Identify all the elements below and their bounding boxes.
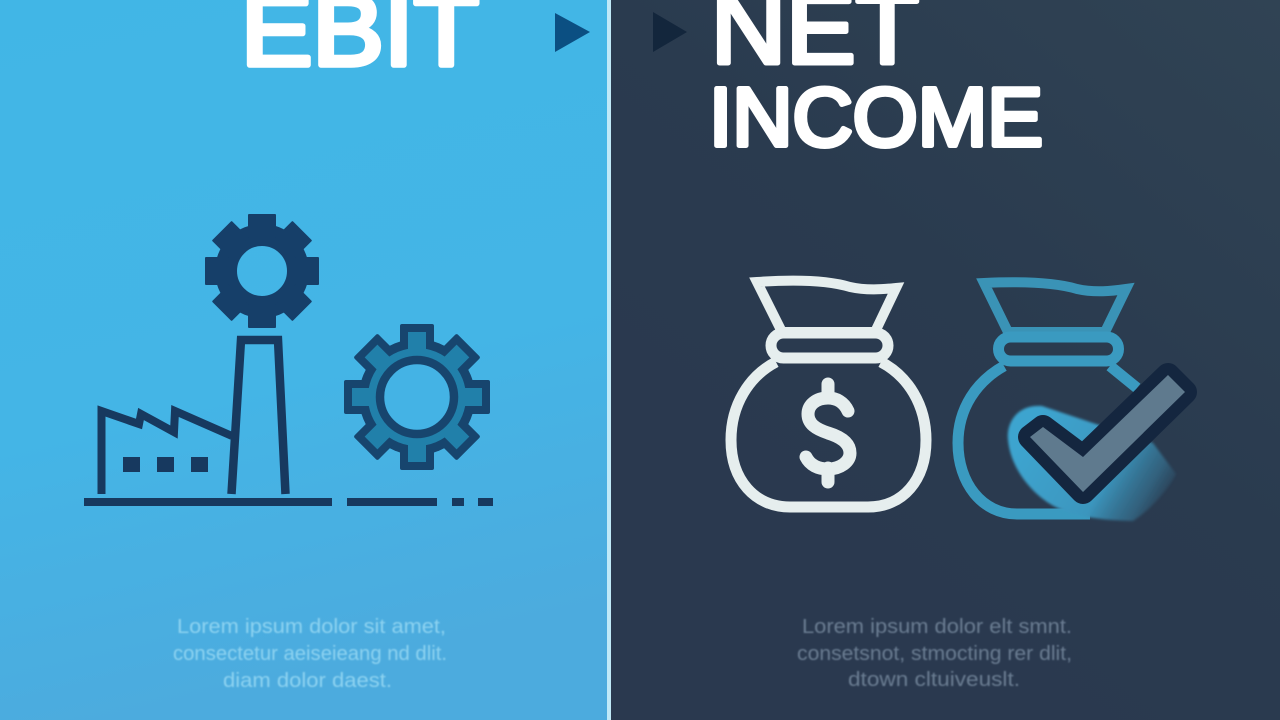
- icon: factory with gears: [84, 214, 493, 506]
- divider: [607, 0, 611, 720]
- icon: ground line: [84, 498, 493, 506]
- panel background: navy: [611, 0, 1280, 720]
- icon: money bag with check mark: [958, 282, 1185, 521]
- text block: EBIT description: Lorem ipsum dolor sit amet,: [177, 616, 446, 638]
- panel: Net Income: [611, 0, 1280, 720]
- icon: dollar sign: [806, 384, 850, 482]
- arrow: net income pointer: [653, 12, 687, 52]
- text block: EBIT description: consectetur aeiseieang nd dlit.: [173, 643, 447, 665]
- icon: factory roof and wall: [102, 411, 232, 494]
- panel background: blue: [0, 0, 608, 720]
- icon: money bag with dollar sign: [731, 281, 926, 507]
- icon: factory chimney: [232, 340, 286, 494]
- text block: net income description: [797, 616, 1072, 691]
- icon: factory windows: [123, 457, 208, 472]
- text block: EBIT description: diam dolor daest.: [223, 670, 392, 692]
- icon: teal money bag outline: [958, 282, 1137, 514]
- panel: EBIT: [0, 0, 608, 720]
- icon: teal glow behind check: [1008, 406, 1176, 521]
- text block: net income description: consetsnot, stmocting rer dlit,: [797, 643, 1072, 665]
- heading: NET INCOME: [709, 0, 1043, 164]
- text block: net income description: Lorem ipsum dolor elt smnt.: [802, 616, 1072, 638]
- text block: EBIT description: [173, 616, 447, 692]
- icon: teal outlined gear: [344, 324, 490, 470]
- heading: NET INCOME: INCOME: [709, 70, 1043, 164]
- icon: dark gear above chimney: [205, 214, 319, 328]
- icon: check mark: [1030, 375, 1185, 492]
- text block: net income description: dtown cltuiveuslt.: [848, 669, 1020, 691]
- arrow: EBIT pointer: [555, 13, 590, 52]
